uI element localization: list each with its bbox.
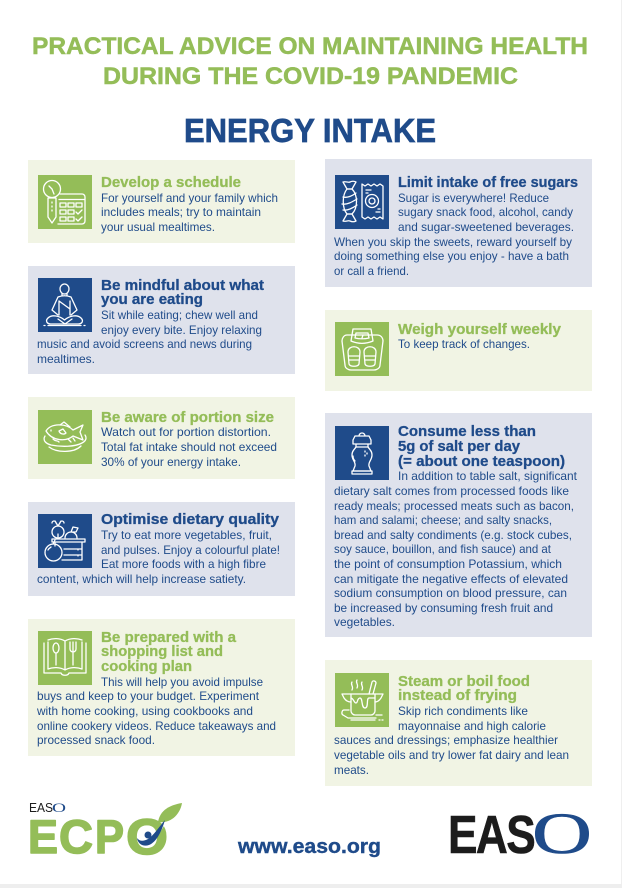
heading: Steam or boil food [398,673,530,690]
panel: salt [325,413,592,637]
body text: includes meals; try to maintain [101,206,261,219]
panel: steam or boil [325,660,592,786]
heading: Optimise dietary quality [101,511,280,528]
body text: To keep track of changes. [398,338,530,351]
body text: doing something else you enjoy - have a bath [334,250,569,263]
body text [37,309,262,366]
title: PRACTICAL ADVICE ON MAINTAINING HEALTH [32,33,588,60]
body text: and sugar-sweetened beverages. [398,221,574,234]
heading [398,673,530,704]
heading: shopping list and [101,643,223,660]
heading [101,277,264,308]
body text: with home cooking, using cookbooks and [36,705,253,718]
body text [334,470,578,629]
body text: vegetable oils and try lower fat dairy and lean [334,749,569,762]
body text: Sugar is everywhere! Reduce [398,192,549,205]
logo: EASO ECPO [28,800,182,865]
icon: candy and sweet wrapper [335,175,389,229]
heading: instead of frying [398,687,517,704]
heading: 5g of salt per day [398,438,521,455]
body text: enjoy every bite. Enjoy relaxing [101,324,262,337]
body text: online cookery videos. Reduce takeaways and [37,720,276,733]
body text: When you skip the sweets, reward yourself by [334,236,572,249]
body text: Watch out for portion distortion. [101,426,271,439]
body text: buys and keep to your budget. Experiment [37,690,260,703]
body text: the point of consumption Potassium, which [334,558,562,571]
body text: can mitigate the negative effects of elevated [334,573,568,586]
body text: mayonnaise and high calorie [398,720,546,733]
body text: or call a friend. [334,265,409,278]
body text: meats. [334,764,369,777]
body text [101,426,277,469]
icon: meditating figure [38,278,92,332]
logo: EASO ECPO: C [59,810,93,863]
body text: content, which will help increase satiety. [37,573,246,586]
heading: Consume less than [398,423,536,440]
body text [334,192,574,278]
body text: bread and salty condiments (e.g. stock cubes, [334,529,572,542]
body text: Sit while eating; chew well and [101,309,258,322]
body text: 30% of your energy intake. [101,456,241,469]
body text: and pulses. Enjoy a colourful plate! [101,544,280,557]
heading: energy intake: ENERGY INTAKE [184,112,436,149]
logo: EASO ECPO: P [95,810,124,863]
body text: vegetables. [334,616,395,629]
body text: your usual mealtimes. [101,221,215,234]
body text: Eat more foods with a high fibre [101,558,266,571]
body text: Try to eat more vegetables, fruit, [101,529,272,542]
heading: Be prepared with a [101,629,237,646]
panel: free sugars [325,159,592,287]
body text [101,192,278,234]
logo: EASO [448,801,592,866]
panel: weigh yourself [325,310,592,391]
panel: develop a schedule [28,160,295,243]
body text: This will help you avoid impulse [101,676,263,689]
body text: mealtimes. [37,353,95,366]
panel: portion size [28,397,295,479]
heading: Be mindful about what [101,277,264,294]
icon: steaming pot [335,673,389,727]
body text: music and avoid screens and news during [37,338,252,351]
title: DURING THE COVID-19 PANDEMIC [103,63,518,90]
logo: EASO ECPO: E [28,810,58,863]
logo: EASO ECPO: O [52,800,66,815]
body text: ready meals; processed meats such as bacon, [334,500,574,513]
icon: bathroom scale [335,322,389,376]
heading [101,629,237,675]
icon: salt shaker [335,426,389,480]
panel: dietary quality [28,502,295,596]
body text: soy sauce, bouillon, and fish sauce) and at [334,543,552,556]
body text: Total fat intake should not exceed [101,441,277,454]
heading: you are eating [101,291,203,308]
heading: cooking plan [101,658,192,675]
body text: ham and salami; cheese; and salty snacks, [334,514,552,527]
icon: cookbook with spoon and fork [38,631,92,685]
heading [398,423,565,470]
icon: clock and calendar [38,175,92,229]
logo: EASO ECPO: EAS [29,800,53,815]
title [32,33,588,90]
body text [37,529,280,586]
body text: Skip rich condiments like [398,705,528,718]
body text: In addition to table salt, significant [398,470,578,483]
body text: sauces and dressings; emphasize healthier [334,734,558,747]
body text [36,676,276,747]
logo: EASO: O [532,801,592,866]
heading: Weigh yourself weekly [398,321,562,338]
icon: fish on plate [38,410,92,464]
icon: fruit and vegetable crate [38,514,92,568]
heading: Limit intake of free sugars [398,174,578,191]
body text: processed snack food. [37,734,155,747]
heading: Develop a schedule [101,174,241,191]
panel: shopping list and cooking plan [28,619,295,756]
body text: For yourself and your family which [101,192,278,205]
website url: www.easo.org [237,836,381,858]
heading: (= about one teaspoon) [398,453,565,470]
body text: sodium consumption on blood pressure, can [334,587,567,600]
body text: sugary snack food, alcohol, candy [398,206,573,219]
body text: be increased by consuming fresh fruit and [334,602,553,615]
body text [334,705,569,777]
logo: EASO ECPO: O [126,809,168,865]
panel: be mindful [28,266,295,374]
body text: dietary salt comes from processed foods like [334,485,569,498]
logo: EASO: EAS [448,805,534,865]
heading: Be aware of portion size [101,409,274,426]
